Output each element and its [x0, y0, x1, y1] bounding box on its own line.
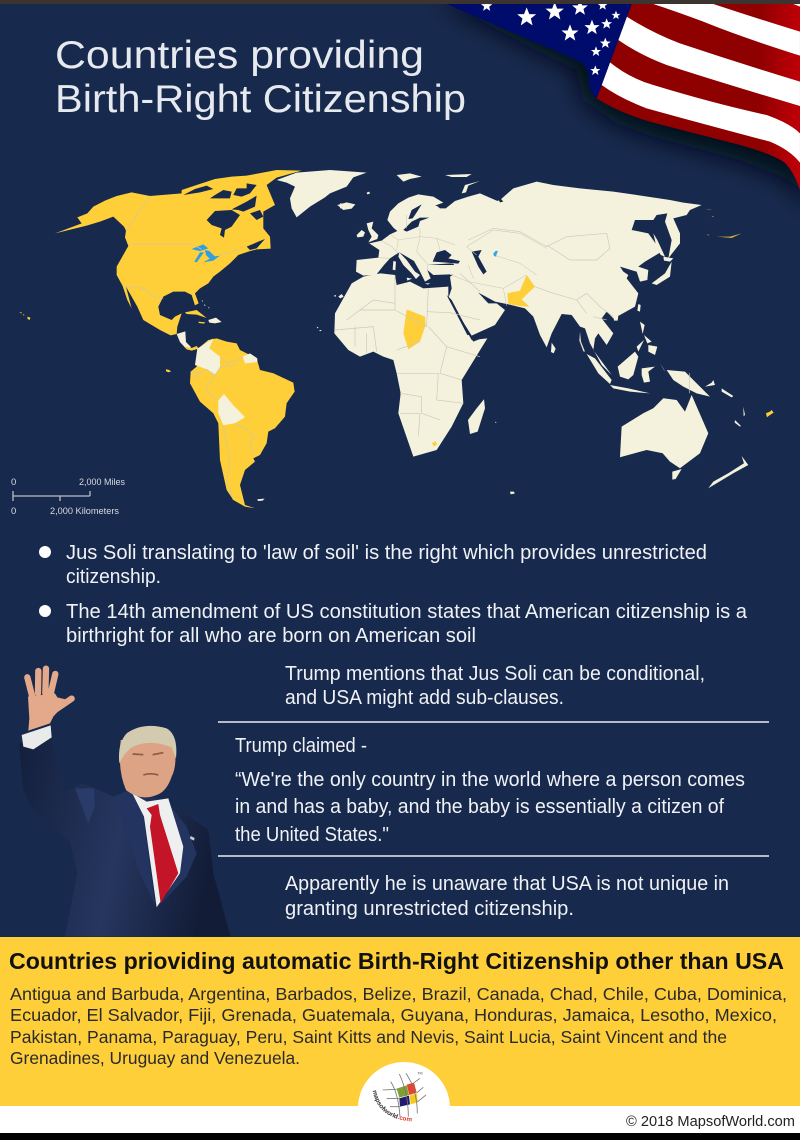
head — [120, 740, 175, 797]
Pacific specks — [705, 209, 742, 238]
Lesotho — [432, 441, 437, 447]
closing note: granting unrestricted citizenship. — [285, 898, 574, 920]
Central America — [177, 331, 191, 349]
top rule — [218, 721, 769, 723]
lapels — [111, 788, 197, 905]
Trump note — [285, 663, 705, 709]
East and South Asia — [437, 182, 745, 427]
Trump quote: “We're the only country in the world where a person comes — [235, 769, 745, 791]
title: Countries providing — [55, 34, 424, 77]
European islands — [340, 173, 480, 285]
flag stripes — [597, 4, 800, 190]
map scale: 0 — [11, 506, 16, 517]
logo — [358, 1062, 450, 1122]
black base — [0, 1133, 800, 1140]
shirt — [132, 793, 183, 907]
Asian islands — [587, 233, 745, 427]
bottom rule — [218, 855, 769, 857]
country list text: Pakistan, Panama, Paraguay, Peru, Saint Kitts and Nevis, Saint Lucia, Saint Vincent and the — [10, 1027, 727, 1047]
raised hand — [27, 669, 72, 731]
Hudson Bay and arctic channels — [183, 183, 265, 250]
title — [55, 34, 466, 121]
Trump note: Trump mentions that Jus Soli can be conditional, — [285, 663, 705, 685]
country list text: Antigua and Barbuda, Argentina, Barbados, Belize, Brazil, Canada, Chad, Chile, Cuba, Dominica, — [10, 984, 787, 1004]
flag canton — [447, 4, 632, 99]
title: Birth-Right Citizenship — [55, 78, 466, 121]
Pakistan — [507, 275, 535, 307]
face features — [133, 753, 163, 775]
Trump quote — [235, 735, 745, 846]
bullet point: 14th amendment: birthright for all who are born on American soil — [66, 625, 476, 647]
Greenland and Iceland — [277, 170, 370, 217]
closing note — [285, 873, 729, 920]
panel heading: Countries prioviding automatic Birth-Right Citizenship other than USA — [9, 948, 784, 974]
Caribbean islands — [19, 310, 207, 372]
Trump figure — [19, 669, 231, 937]
tie — [147, 804, 178, 903]
bullet point: 14th amendment: The 14th amendment of US constitution states that American citizenship is a — [66, 601, 748, 623]
american flag — [447, 0, 800, 190]
Trump note: and USA might add sub-clauses. — [285, 687, 564, 709]
Aral Sea — [493, 251, 498, 257]
Old World overlays — [335, 228, 774, 494]
lapel pin — [190, 836, 195, 841]
map scale: 2,000 Miles — [79, 477, 125, 488]
Trump quote: the United States." — [235, 824, 389, 846]
bullet point: Jus Soli: Jus Soli translating to 'law of soil' is the right which provides unrestricted — [66, 542, 707, 564]
Great Lakes — [192, 244, 220, 262]
panel: country list — [0, 937, 800, 1106]
flag stars — [481, 0, 620, 75]
closing note: Apparently he is unaware that USA is not unique in — [285, 873, 729, 895]
map scale — [11, 477, 125, 517]
Asia and Africa borders — [335, 228, 689, 437]
North America — [55, 170, 302, 335]
top bar — [0, 0, 800, 4]
bullet point: Jus Soli — [39, 542, 707, 588]
flag shadow — [440, 0, 800, 207]
Fiji — [766, 410, 774, 417]
country list text: Grenadines, Uruguay and Venezuela. — [10, 1048, 300, 1068]
Colombia, Guianas and Bolivia — [195, 338, 257, 425]
southern islands and Oceania — [468, 343, 748, 494]
Red Sea and Gulf of Aden — [447, 295, 495, 342]
bullet point: 14th amendment — [39, 601, 748, 647]
South America — [190, 338, 295, 508]
Italy and Turkey — [398, 252, 473, 279]
bullet point: Jus Soli: citizenship. — [66, 566, 161, 588]
North and South America borders — [123, 196, 255, 500]
logo wordmark: mapsofworld.com — [372, 1090, 412, 1122]
Americas — [19, 170, 370, 508]
Europe and Central Asia borders — [378, 215, 547, 306]
cuff — [22, 725, 52, 749]
country list text: Ecuador, El Salvador, Fiji, Grenada, Guatemala, Guyana, Honduras, Jamaica, Lesotho, Mexico, — [10, 1005, 777, 1025]
hair — [119, 726, 176, 763]
Trump quote: Trump claimed - — [235, 735, 367, 757]
logo: TM — [417, 1071, 423, 1075]
Trump quote: in and has a baby, and the baby is essentially a citizen of — [235, 796, 724, 818]
Europe — [340, 173, 547, 306]
map scale: 0 — [11, 477, 16, 488]
Africa and Arabia — [334, 272, 505, 457]
footer band — [0, 1106, 800, 1133]
copyright: © 2018 MapsofWorld.com — [626, 1114, 795, 1130]
country list text — [10, 984, 787, 1068]
suit — [19, 736, 231, 937]
map scale: 2,000 Kilometers — [50, 506, 119, 517]
Chad — [403, 309, 426, 349]
world map — [19, 170, 774, 508]
Baltic, White Sea, Black Sea and Caspian — [403, 190, 503, 274]
